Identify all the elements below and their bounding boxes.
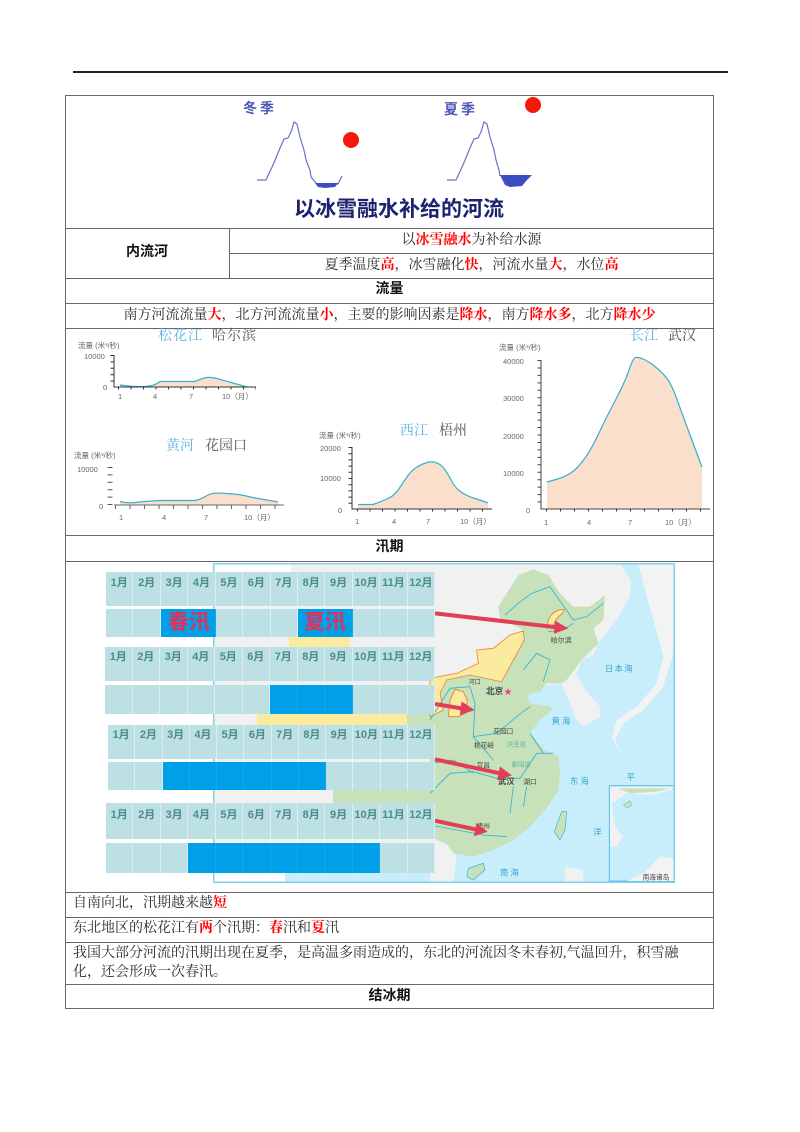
map of China with rivers: 日本海	[605, 663, 634, 673]
snow-melt zone	[448, 689, 467, 717]
chart: Yellow River at Huayuankou: 4	[162, 513, 166, 522]
label: summer flood: 夏汛	[304, 611, 346, 634]
month table: Yangtze header: 12月	[409, 729, 432, 741]
chart: Yangtze River at Wuhan: 7	[628, 518, 632, 527]
chart: Xi River at Wuzhou: 10000	[320, 474, 341, 483]
month table: Yangtze header: 3月	[167, 729, 184, 741]
icon: winter water	[315, 183, 338, 188]
month table: Xi River header: 8月	[303, 809, 320, 821]
text: flood explanation: 我国大部分河流的汛期出现在夏季，是高温多雨造成的，东北的河流因冬末春初,气温回升，积雪融	[73, 946, 678, 961]
month table: Yangtze header: 8月	[303, 729, 320, 741]
month table: Xi River header: 1月	[111, 809, 128, 821]
chart: Yellow River at Huayuankou: 1	[119, 513, 123, 522]
chart: Xi River at Wuzhou: 0	[338, 506, 342, 515]
chart: Xi River at Wuzhou: 20000	[320, 444, 341, 453]
chart: Yangtze River at Wuhan: 1	[544, 518, 548, 527]
flood bar: Songhua	[106, 609, 435, 637]
chart: Yangtze River at Wuhan: 10（月）	[665, 518, 696, 527]
chart: Yangtze River at Wuhan: 武汉	[668, 328, 696, 344]
chart: Xi River at Wuzhou: 4	[392, 517, 396, 526]
month table: Yangtze header: 4月	[194, 729, 211, 741]
icon: summer sun	[525, 97, 541, 113]
flood bar: Yellow River	[105, 685, 435, 714]
chart: Yangtze River at Wuhan: 10000	[503, 469, 524, 478]
label: summer: 夏季	[444, 99, 478, 119]
month table: Xi River header: 4月	[193, 809, 210, 821]
chart: Xi River at Wuzhou: 梧州	[439, 422, 467, 439]
chart: Yangtze River at Wuhan: 20000	[503, 432, 524, 441]
month table: Yellow River header: 1月	[110, 651, 127, 663]
month table: Xi River header: 5月	[220, 809, 237, 821]
map of China with rivers: 鄱阳湖	[512, 760, 531, 769]
month table: Songhua header: 11月	[382, 577, 405, 589]
chart: Songhua River at Harbin	[78, 327, 257, 401]
flood bar: Yangtze	[108, 762, 435, 790]
month table: Songhua header: 4月	[193, 577, 210, 589]
month table: Yellow River header: 6月	[247, 651, 264, 663]
month table: Yellow River header: 12月	[409, 651, 432, 663]
chart: Songhua River at Harbin: 流量 (米³/秒)	[78, 340, 120, 350]
flood bar: Xi River	[106, 843, 435, 873]
chart: Yellow River at Huayuankou: 7	[204, 513, 208, 522]
map of China with rivers: 北京	[486, 685, 504, 696]
map of China with rivers: 哈尔滨	[551, 636, 572, 645]
text: meltwater source: 以冰雪融水为补给水源	[402, 233, 542, 248]
month table: Xi River header: 6月	[248, 809, 265, 821]
chart: Yellow River at Huayuankou: 0	[99, 502, 103, 511]
chart: Xi River at Wuzhou: 10（月）	[460, 517, 491, 526]
month table: Songhua header: 1月	[111, 577, 128, 589]
chart: Yangtze River at Wuhan: 0	[526, 506, 530, 515]
text: two flood seasons: 东北地区的松花江有两个汛期：春汛和夏汛	[73, 921, 339, 936]
month table: Songhua header: 2月	[138, 577, 155, 589]
month table: Xi River header: 3月	[165, 809, 183, 821]
table frame	[65, 95, 714, 1009]
month table: Yangtze header: 2月	[140, 729, 157, 741]
heading: discharge: 流量	[376, 280, 404, 296]
chart: Xi River at Wuzhou: 流量 (米³/秒)	[319, 430, 361, 440]
text: flood duration: 自南向北，汛期越来越短	[73, 896, 227, 911]
month table: Yellow River header: 8月	[302, 651, 319, 663]
month table: Yangtze header: 10月	[355, 729, 378, 741]
text: flood explanation	[73, 944, 678, 980]
month table: Yellow River header	[105, 647, 435, 681]
month table: Songhua header: 8月	[303, 577, 320, 589]
month table: Songhua header: 10月	[354, 577, 378, 589]
chart: Songhua River at Harbin: 0	[103, 383, 107, 392]
month table: Yellow River header: 3月	[165, 651, 182, 663]
month table: Songhua header: 12月	[409, 577, 432, 589]
month table: Yellow River header: 2月	[137, 651, 154, 663]
month table: Yangtze header	[108, 725, 435, 759]
Taiwan and Hainan	[554, 812, 567, 840]
Rivers	[430, 587, 603, 837]
month table: Yellow River header: 5月	[220, 651, 237, 663]
chart: Xi River at Wuzhou	[319, 422, 492, 526]
chart: Songhua River at Harbin: 松花江	[158, 327, 203, 344]
illustration title: 以冰雪融水补给的河流	[294, 198, 504, 221]
chart: Songhua River at Harbin: 1	[118, 392, 122, 401]
month table: Yellow River header: 7月	[275, 651, 292, 663]
Inner Mongolia arid region	[430, 631, 524, 717]
month table: Xi River header: 9月	[330, 809, 347, 821]
month table: Yellow River header: 10月	[354, 651, 377, 663]
text: summer melt: 夏季温度高，冰雪融化快，河流水量大，水位高	[324, 258, 618, 273]
label: spring flood: 春汛	[168, 611, 210, 634]
month table: Yellow River header: 11月	[382, 651, 405, 663]
map of China with rivers: 武汉	[498, 777, 514, 786]
heading: flood season: 汛期	[376, 538, 404, 554]
row: inland river label: 内流河	[126, 243, 168, 259]
chart: Yangtze River at Wuhan: 流量 (米³/秒)	[499, 342, 541, 352]
map of China with rivers: 桃花峪	[474, 740, 494, 749]
map of China with rivers: 河口	[469, 678, 481, 686]
label: winter: 冬季	[243, 98, 277, 118]
map of China with rivers: 黄海	[552, 716, 572, 726]
month table: Xi River header	[106, 803, 435, 839]
month table: Songhua header: 9月	[330, 577, 347, 589]
chart: Yangtze River at Wuhan	[499, 328, 710, 527]
map of China with rivers: 南海诸岛	[643, 872, 670, 881]
Arrows	[435, 613, 568, 836]
chart: Songhua River at Harbin: 10000	[84, 352, 105, 361]
icon: summer water	[500, 175, 532, 187]
month table: Songhua header: 7月	[275, 577, 292, 589]
chart: Songhua River at Harbin: 哈尔滨	[212, 328, 257, 344]
chart: Songhua River at Harbin: 10（月）	[222, 392, 253, 401]
icon: summer mountain	[447, 122, 500, 180]
month table: Xi River header: 12月	[409, 809, 432, 821]
month table: Yangtze header: 11月	[382, 729, 405, 741]
month table: Yangtze header: 7月	[276, 729, 293, 741]
month table: Songhua header: 3月	[165, 577, 183, 589]
month table: Xi River header: 11月	[382, 809, 405, 821]
map of China with rivers: 南海	[500, 868, 521, 878]
month table: Yellow River header: 9月	[330, 651, 347, 663]
chart: Xi River at Wuzhou: 西江	[400, 423, 428, 439]
icon: winter mountain	[257, 122, 342, 184]
chart: Xi River at Wuzhou: 1	[355, 517, 359, 526]
chart: Xi River at Wuzhou: 7	[426, 517, 430, 526]
month table: Yangtze header: 5月	[222, 729, 239, 741]
top rule	[73, 71, 728, 73]
map of China with rivers: 洪泽湖	[507, 740, 526, 749]
map of China with rivers: 湖口	[523, 777, 537, 786]
heading: freezing period: 结冰期	[368, 987, 410, 1003]
month table: Xi River header: 2月	[138, 809, 155, 821]
month table: Songhua header: 5月	[220, 577, 237, 589]
chart: Yellow River at Huayuankou: 10000	[77, 465, 98, 474]
month table: Yangtze header: 6月	[249, 729, 266, 741]
map of China with rivers: ★	[504, 688, 512, 697]
map of China with rivers: 洋	[593, 827, 602, 837]
month table: Xi River header: 10月	[354, 809, 378, 821]
map of China with rivers: 花园口	[493, 726, 513, 735]
chart: Yellow River at Huayuankou: 黄河	[166, 438, 194, 454]
chart: Yellow River at Huayuankou: 10（月）	[244, 513, 275, 522]
text: discharge summary: 南方河流流量大，北方河流流量小，主要的影响因素是降水，南方降水多，北方降水少	[124, 308, 656, 323]
illustration: snowmelt-fed river	[243, 97, 541, 221]
chart: Yangtze River at Wuhan: 长江	[630, 328, 658, 344]
map of China with rivers: 宜昌	[477, 760, 490, 769]
chart: Yangtze River at Wuhan: 40000	[503, 357, 524, 366]
chart: Songhua River at Harbin: 4	[153, 392, 157, 401]
month table: Yangtze header: 9月	[331, 729, 348, 741]
text: flood explanation: 化，还会形成一次春汛。	[73, 965, 227, 980]
map of China with rivers: 东海	[570, 776, 591, 786]
chart: Yangtze River at Wuhan: 30000	[503, 394, 524, 403]
chart: Yellow River at Huayuankou: 花园口	[205, 437, 247, 454]
map of China with rivers: 平	[627, 772, 635, 782]
month table: Yangtze header: 1月	[113, 729, 130, 741]
China landmass	[430, 569, 605, 857]
map of China with rivers: 梧州	[477, 821, 490, 830]
month table: Songhua header: 6月	[248, 577, 265, 589]
chart: Yellow River at Huayuankou: 流量 (米³/秒)	[74, 450, 116, 460]
month table: Xi River header: 7月	[275, 809, 292, 821]
chart: Yangtze River at Wuhan: 4	[587, 518, 591, 527]
icon: winter sun	[343, 132, 359, 148]
month table: Yellow River header: 4月	[192, 651, 209, 663]
South China Sea inset	[609, 786, 674, 881]
month table: Songhua header	[106, 572, 435, 606]
neighbouring land	[430, 563, 631, 727]
chart: Yellow River at Huayuankou	[74, 437, 284, 522]
chart: Songhua River at Harbin: 7	[189, 392, 193, 401]
map of China with rivers	[213, 563, 675, 883]
